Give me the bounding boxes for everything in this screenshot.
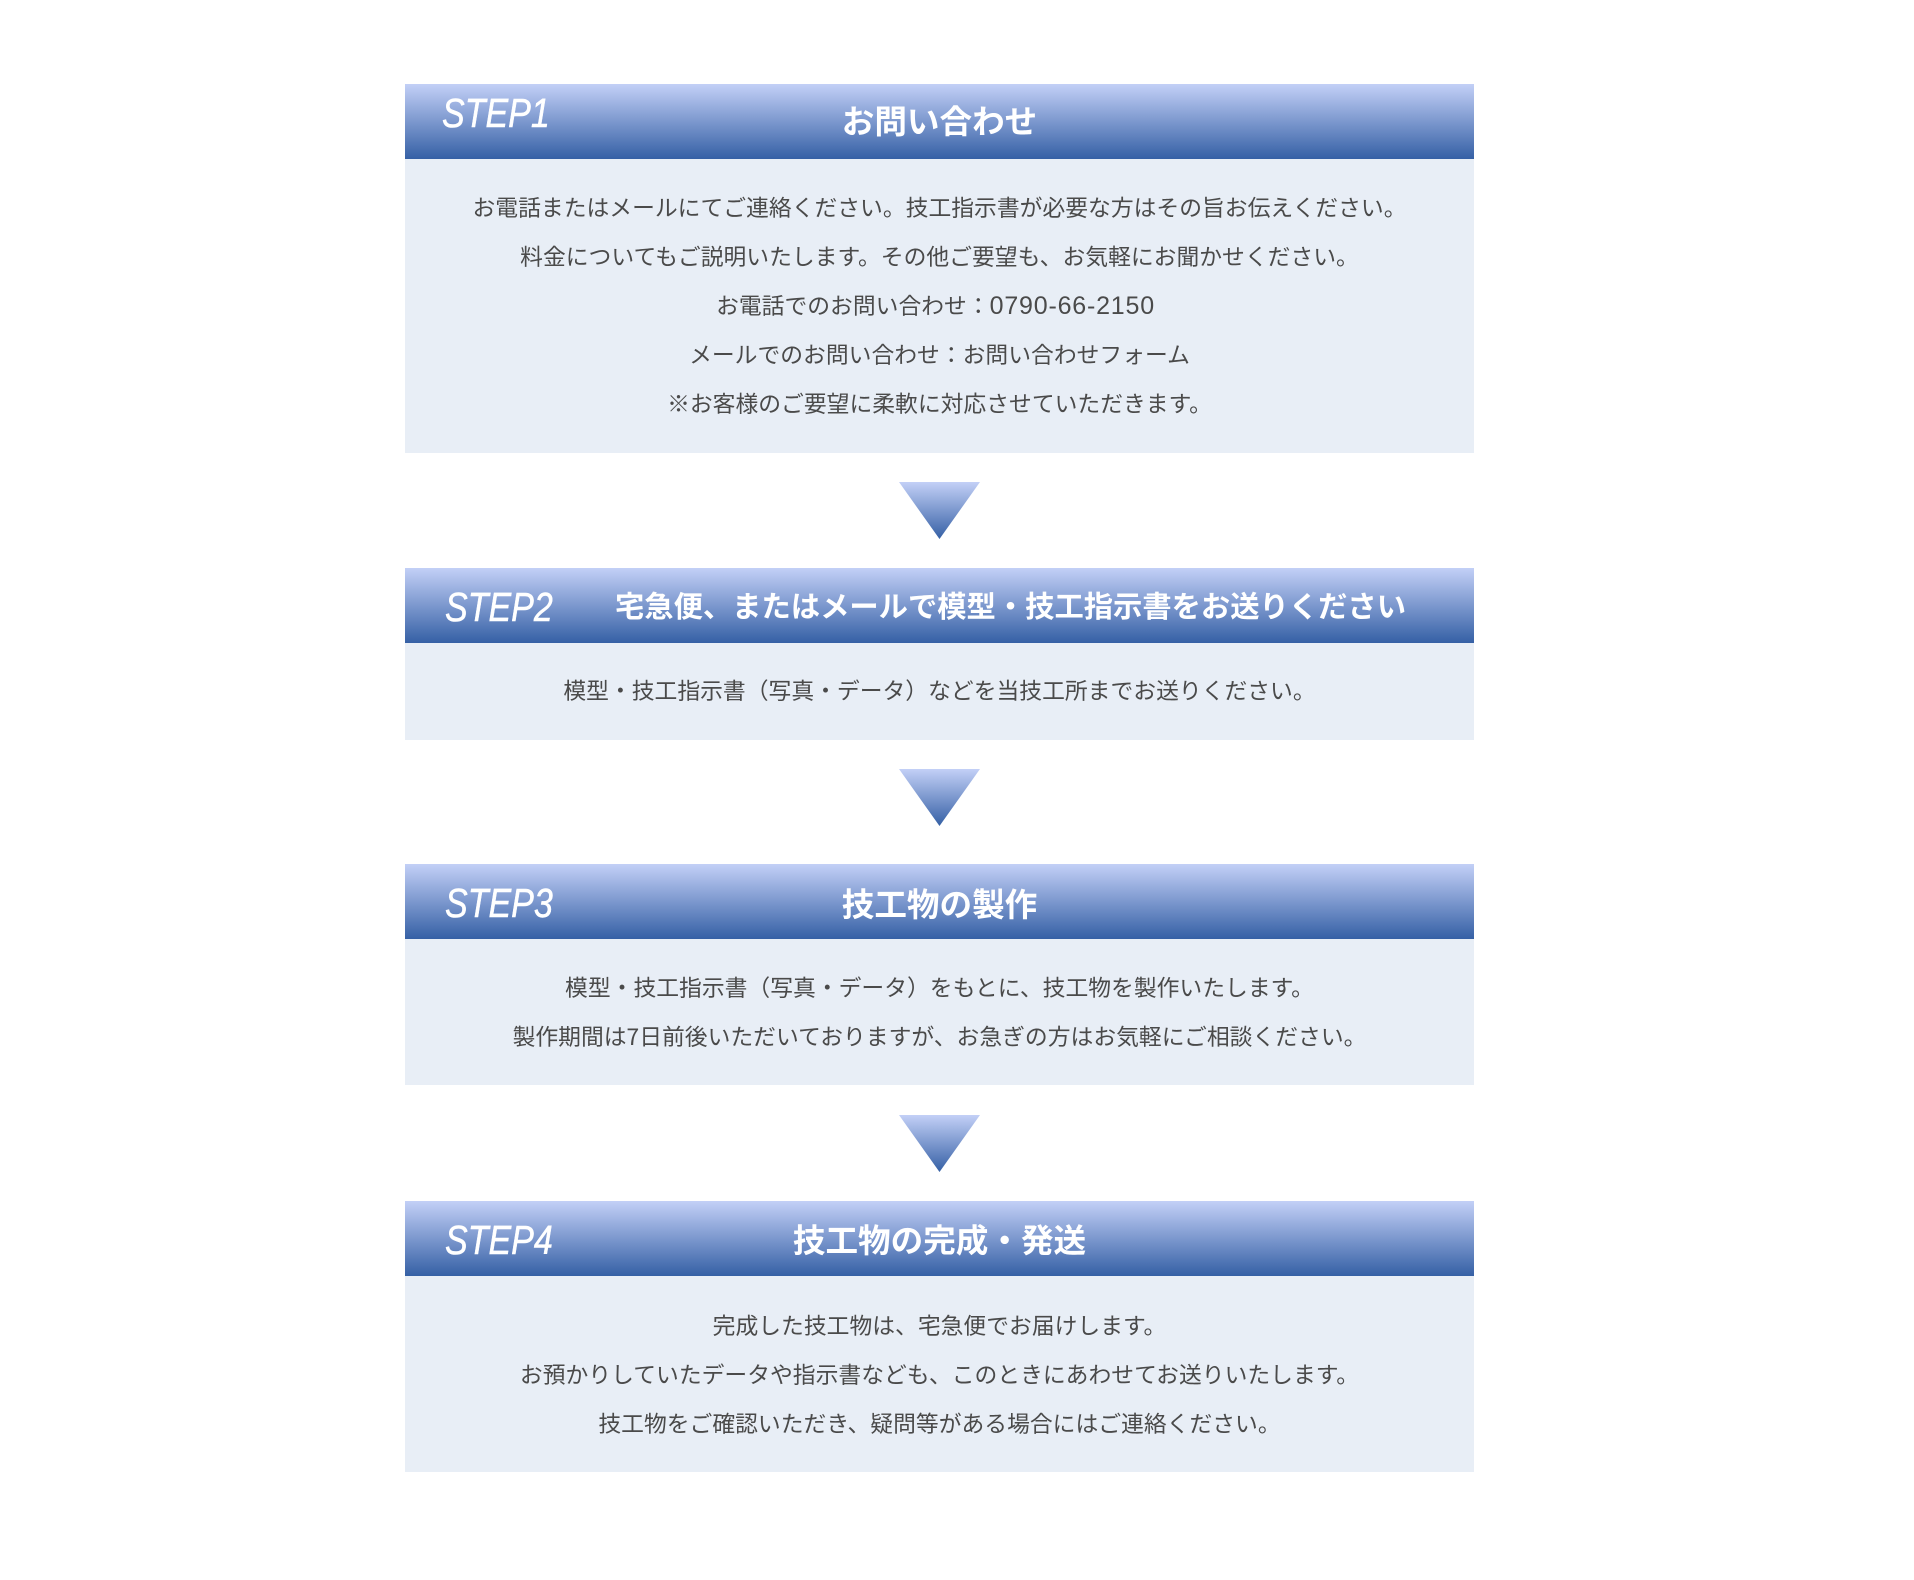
text block: step 4: 技工物をご確認いただき、疑問等がある場合にはご連絡ください。 <box>598 1406 1281 1438</box>
text block: step 1: ※お客様のご要望に柔軟に対応させていただきます。 <box>667 386 1212 419</box>
panel: step 3 <box>405 864 1474 1085</box>
text block: step 2: 模型・技工指示書（写真・データ）などを当技工所までお送りください。 <box>563 673 1316 706</box>
header bar: step 4 <box>405 1201 1474 1276</box>
text block: step 1: 料金についてもご説明いたします。その他ご要望も、お気軽にお聞かせください。 <box>520 239 1359 272</box>
text block: step 3 <box>513 970 1366 1052</box>
arrow: step 1 to 2 <box>899 482 980 539</box>
panel: step 4 <box>405 1201 1474 1472</box>
step label: STEP4: STEP4 <box>445 1216 553 1262</box>
text block: step 3: 模型・技工指示書（写真・データ）をもとに、技工物を製作いたします。 <box>565 970 1314 1003</box>
header bar: step 3 <box>405 864 1474 939</box>
heading: step 2: 宅急便、またはメールで模型・技工指示書をお送りください <box>615 584 1406 626</box>
text block: step 4: お預かりしていたデータや指示書なども、このときにあわせてお送りいたします。 <box>520 1356 1359 1390</box>
heading: step 3: 技工物の製作 <box>842 879 1037 926</box>
step label: STEP2: STEP2 <box>445 584 553 630</box>
step label: STEP3: STEP3 <box>445 880 553 926</box>
header bar: step 1 <box>405 84 1474 159</box>
text block: step 1: お電話でのお問い合わせ：0790-66-2150 <box>716 288 1155 321</box>
heading: step 4: 技工物の完成・発送 <box>793 1214 1086 1262</box>
header bar: step 2 <box>405 568 1474 643</box>
heading: step 1: お問い合わせ <box>842 96 1037 143</box>
panel: step 1 <box>405 84 1474 452</box>
step label: STEP1: STEP1 <box>442 90 550 136</box>
text block: step 1: お電話またはメールにてご連絡ください。技工指示書が必要な方はその旨お伝えください。 <box>472 190 1406 223</box>
panel: step 2 <box>405 568 1474 740</box>
text block: step 1 <box>472 190 1406 419</box>
arrow: step 3 to 4 <box>899 1115 980 1172</box>
arrow: step 2 to 3 <box>899 769 980 826</box>
text block: step 4: 完成した技工物は、宅急便でお届けします。 <box>713 1308 1166 1340</box>
text block: step 4 <box>520 1308 1359 1438</box>
text block: step 3: 製作期間は7日前後いただいておりますが、お急ぎの方はお気軽にご相談ください。 <box>513 1019 1366 1052</box>
text block: step 1: メールでのお問い合わせ：お問い合わせフォーム <box>689 337 1190 370</box>
